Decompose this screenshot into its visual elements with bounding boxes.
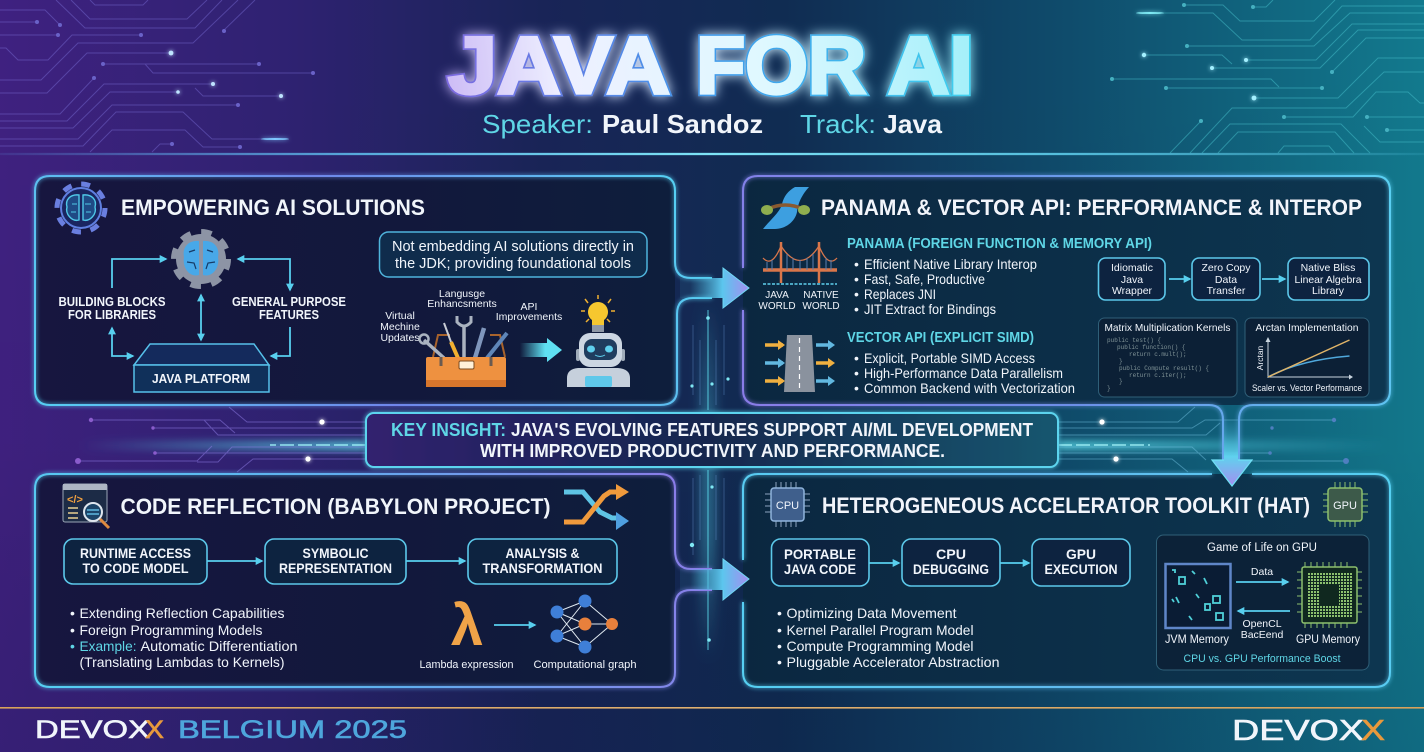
flow: panama: Zero Copy — [1201, 262, 1251, 274]
panel: matrix multiplication kernels: } — [1107, 385, 1111, 392]
icon: GPU chip: GPU — [1333, 500, 1357, 512]
footer logo: devoxx — [1232, 715, 1385, 747]
bullets: HAT: Pluggable Accelerator Abstraction — [786, 654, 1000, 670]
key insight banner: KEY INSIGHT: — [391, 419, 506, 440]
bullets: panama: • — [854, 271, 859, 287]
bullets: panama: • — [854, 301, 859, 317]
panel: matrix multiplication kernels: } — [1119, 358, 1123, 365]
labels: toolbox: Improvements — [496, 311, 562, 323]
title: AI — [888, 21, 973, 111]
footer logo: devoxx belgium 2025 — [35, 716, 407, 744]
bullets: vector API: • — [854, 380, 859, 396]
bullets: code reflection: Foreign Programming Models — [80, 622, 262, 638]
bullets: code reflection — [70, 605, 298, 670]
bullets: HAT — [777, 605, 1000, 670]
title: FOR — [696, 21, 866, 111]
panel: matrix multiplication kernels — [1098, 318, 1237, 397]
bullets: panama — [854, 256, 1037, 317]
connector circuitry: centre — [690, 300, 730, 660]
footer logo: devoxx belgium 2025: BELGIUM 2025 — [178, 716, 407, 744]
bullets: panama: • — [854, 256, 859, 272]
icon: bridge — [763, 242, 837, 284]
label: general purpose features: GENERAL PURPOSE — [232, 294, 346, 309]
heading: HETEROGENEOUS ACCELERATOR TOOLKIT (HAT) — [822, 493, 1310, 518]
flow: HAT: JAVA CODE — [784, 561, 856, 577]
labels: java world and native world: WORLD — [758, 301, 796, 312]
bullets: code reflection: • — [70, 605, 75, 621]
flow: panama: Library — [1312, 285, 1345, 297]
callout: the JDK; providing foundational tools — [395, 255, 631, 272]
label: building blocks: FOR LIBRARIES — [68, 307, 156, 322]
panel: empowering AI solutions — [35, 176, 712, 405]
panel: matrix multiplication kernels: return c.iter(); — [1129, 372, 1187, 379]
labels: toolbox — [380, 288, 562, 344]
java platform block: JAVA PLATFORM — [152, 371, 250, 386]
icon: lambda: λ — [451, 593, 483, 658]
footer logo: devoxx: DEVOX — [1232, 715, 1364, 747]
panel: matrix multiplication kernels: return c.mult(); — [1129, 351, 1187, 358]
bullets: vector API: • — [854, 350, 859, 366]
labels: toolbox: Mechine — [380, 321, 420, 333]
icon: code window with magnifier — [63, 484, 109, 528]
label: general purpose features — [232, 294, 346, 322]
flow: panama: Wrapper — [1112, 285, 1153, 297]
bullets: vector API: • — [854, 365, 859, 381]
panel: matrix multiplication kernels: public function() { — [1117, 344, 1186, 351]
icon: CPU chip — [765, 482, 810, 527]
panel: matrix multiplication kernels: } — [1119, 378, 1123, 385]
flow: HAT: GPU — [1066, 546, 1096, 562]
subtitle: speaker and track — [482, 109, 943, 139]
JVM memory grid — [1166, 564, 1230, 628]
connector circuitry: right — [1058, 407, 1390, 472]
key insight banner: JAVA'S EVOLVING FEATURES SUPPORT AI/ML DEVELOPMENT — [511, 419, 1034, 440]
flow: code reflection: TO CODE MODEL — [82, 560, 189, 576]
flow: code reflection: ANALYSIS & — [506, 545, 580, 561]
icon: CPU chip: CPU — [776, 500, 799, 512]
bullets: panama: Fast, Safe, Productive — [864, 271, 985, 287]
flow: HAT: EXECUTION — [1044, 561, 1118, 577]
heading: vector API: VECTOR API (EXPLICIT SIMD) — [847, 330, 1034, 346]
bullets: code reflection: (Translating Lambdas to Kernels) — [80, 654, 284, 670]
subtitle: speaker and track: Track: — [800, 109, 876, 139]
title — [448, 21, 973, 111]
labels: toolbox: Virtual — [385, 310, 415, 322]
labels: java world and native world: NATIVE — [803, 290, 839, 301]
bullets: HAT: • — [777, 654, 782, 670]
labels: toolbox: API — [521, 301, 537, 313]
flow: panama: Java — [1121, 274, 1143, 286]
subtitle: speaker and track: Speaker: — [482, 109, 593, 139]
cycle arrows — [112, 259, 290, 356]
icon: river and bridge — [761, 187, 810, 229]
bullets: code reflection: Automatic Differentiation — [140, 638, 298, 654]
icon: robot with light bulb — [567, 295, 630, 387]
panel: game of life on GPU — [1156, 535, 1369, 670]
bullets: vector API — [854, 350, 1075, 396]
panel: matrix multiplication kernels: public test() { — [1107, 337, 1161, 344]
arrow: toolbox to robot — [520, 338, 562, 362]
label: building blocks — [58, 294, 166, 322]
bullets: HAT: • — [777, 605, 782, 621]
caption: computational graph: Computational graph — [534, 659, 636, 671]
icon: central gear brain — [174, 232, 228, 286]
panel: code reflection — [35, 474, 712, 687]
panel: arctan chart: Arctan Implementation — [1256, 322, 1359, 334]
labels: java world and native world: JAVA — [765, 290, 789, 301]
bullets: code reflection: Example: — [80, 638, 136, 654]
flow: code reflection: SYMBOLIC — [302, 545, 368, 561]
bullets: HAT: Kernel Parallel Program Model — [786, 622, 974, 638]
labels: toolbox: Langusge — [439, 288, 485, 300]
flow: panama: Data — [1215, 274, 1237, 286]
icon: code window with magnifier: </> — [67, 494, 83, 506]
footer logo: devoxx: X — [1361, 715, 1385, 747]
arrow: to panama panel — [680, 268, 749, 308]
bullets: panama: Replaces JNI — [864, 286, 936, 302]
panel: matrix multiplication kernels: public Compute result() { — [1119, 365, 1209, 372]
data flow arrows: BacEend — [1241, 629, 1283, 641]
panel: arctan chart — [1245, 318, 1369, 397]
labels: java world and native world: WORLD — [802, 301, 840, 312]
heading: panama: PANAMA (FOREIGN FUNCTION & MEMORY API) — [847, 236, 1152, 252]
panel: panama and vector API — [743, 176, 1390, 460]
arrow: lambda to graph — [494, 624, 535, 626]
bullets: vector API: High-Performance Data Parallelism — [864, 365, 1063, 381]
title: JAVA — [448, 21, 670, 111]
bullets: panama: • — [854, 286, 859, 302]
icon: brain gear — [57, 184, 105, 232]
connector circuitry: left — [75, 407, 366, 472]
flow: HAT: CPU — [936, 546, 966, 562]
flow: code reflection: REPRESENTATION — [279, 560, 392, 576]
data flow arrows: Data — [1251, 566, 1273, 578]
label: building blocks: BUILDING BLOCKS — [58, 294, 166, 309]
flow: panama: Native Bliss — [1301, 262, 1355, 274]
panel: matrix multiplication kernels: Matrix Multiplication Kernels — [1104, 322, 1230, 334]
circuit pattern: top left — [0, 0, 315, 152]
flow: panama: Linear Algebra — [1294, 274, 1362, 286]
flow: code reflection — [64, 539, 617, 584]
panel: game of life on GPU: Game of Life on GPU — [1207, 542, 1317, 554]
bullets: HAT: Optimizing Data Movement — [786, 605, 957, 621]
java platform block — [134, 344, 269, 392]
bullets: HAT: • — [777, 622, 782, 638]
icon: shuffle arrows — [564, 484, 629, 530]
subtitle: speaker and track: Paul Sandoz — [602, 109, 763, 139]
footer rule — [0, 707, 1424, 709]
footer logo: devoxx belgium 2025: DEVOX — [35, 716, 150, 744]
bullets: code reflection: • — [70, 638, 75, 654]
key insight banner — [366, 413, 1058, 467]
panel: arctan chart: Arctan — [1255, 345, 1265, 370]
arrow: panama down to HAT — [1212, 420, 1252, 486]
icon: computational graph — [550, 594, 618, 654]
bullets: HAT: Compute Programming Model — [786, 638, 974, 654]
flow: panama: Transfer — [1207, 285, 1246, 297]
bullets: panama: JIT Extract for Bindings — [864, 301, 996, 317]
memory labels — [1165, 634, 1360, 646]
bullets: panama: Efficient Native Library Interop — [864, 256, 1037, 272]
icon: GPU chip — [1323, 482, 1368, 527]
bullets: vector API: Common Backend with Vectorization — [864, 380, 1075, 396]
key insight banner: WITH IMPROVED PRODUCTIVITY AND PERFORMANCE. — [480, 440, 945, 461]
labels: java world and native world — [758, 290, 840, 312]
data flow arrows — [1236, 566, 1290, 641]
footer logo: devoxx belgium 2025: X — [145, 716, 164, 744]
heading: PANAMA & VECTOR API: PERFORMANCE & INTEROP — [821, 195, 1362, 220]
title: JAVA — [448, 21, 670, 111]
panel: heterogeneous accelerator toolkit — [743, 474, 1390, 687]
memory labels: GPU Memory — [1296, 634, 1360, 646]
callout: Not embedding AI solutions directly in — [392, 238, 634, 255]
labels: toolbox: Updates — [380, 332, 420, 344]
title: AI — [888, 21, 973, 111]
label: general purpose features: FEATURES — [259, 307, 319, 322]
flow: panama: Idiomatic — [1111, 262, 1153, 274]
title: FOR — [696, 21, 866, 111]
caption: lambda expression: Lambda expression — [420, 659, 514, 671]
heading: EMPOWERING AI SOLUTIONS — [121, 195, 425, 220]
circuit pattern: top right — [1110, 0, 1424, 153]
icon: toolbox — [420, 316, 507, 387]
labels: toolbox: Enhancsments — [427, 298, 497, 310]
flow: HAT: DEBUGGING — [913, 561, 989, 577]
memory labels: JVM Memory — [1165, 634, 1229, 646]
icon: vector road — [765, 335, 835, 392]
bullets: code reflection: Extending Reflection Capabilities — [80, 605, 284, 621]
heading: CODE REFLECTION (BABYLON PROJECT) — [120, 494, 550, 519]
flow: code reflection: RUNTIME ACCESS — [80, 545, 191, 561]
bullets: HAT: • — [777, 638, 782, 654]
bullets: code reflection: • — [70, 622, 75, 638]
flow: HAT: PORTABLE — [784, 546, 856, 562]
subtitle: speaker and track: Java — [883, 109, 943, 139]
flow: code reflection: TRANSFORMATION — [482, 560, 602, 576]
data flow arrows: OpenCL — [1242, 618, 1282, 630]
flow: HAT — [772, 539, 1130, 586]
GPU memory chip — [1297, 562, 1362, 628]
panel: arctan chart: Scaler vs. Vector Performance — [1252, 383, 1362, 394]
callout — [380, 232, 647, 277]
bullets: vector API: Explicit, Portable SIMD Access — [864, 350, 1035, 366]
flow: panama — [1098, 258, 1369, 300]
arrow: to HAT panel — [680, 559, 749, 600]
performance caption: CPU vs. GPU Performance Boost — [1184, 653, 1340, 665]
